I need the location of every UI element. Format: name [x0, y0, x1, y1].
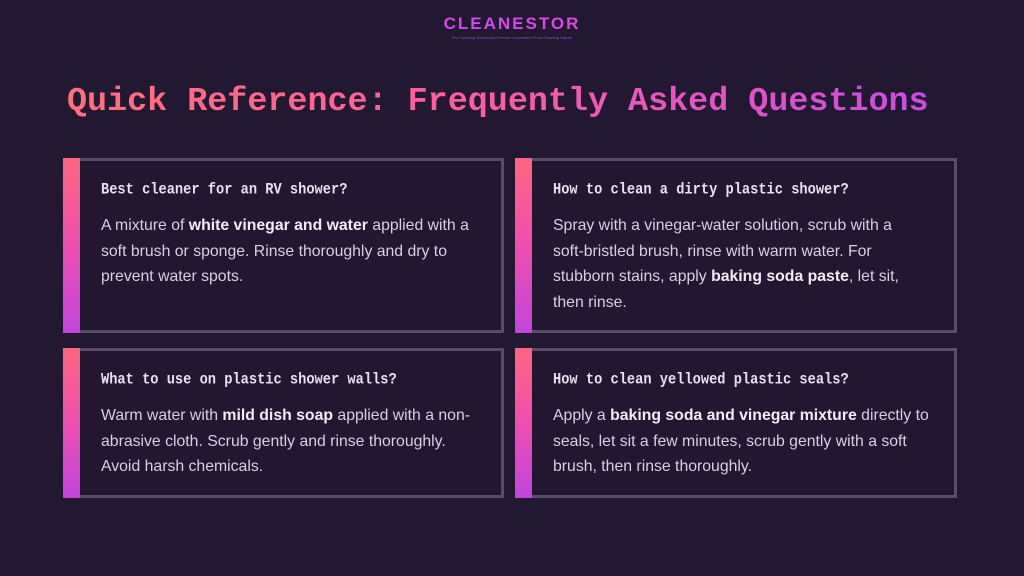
- heading: How to clean a dirty plastic shower?: [553, 182, 849, 199]
- text block: stubborn stains, apply baking soda paste, let sit,: [553, 268, 899, 285]
- title: Quick Reference: Frequently Asked Questions: [67, 83, 929, 121]
- heading: Best cleaner for an RV shower?: [101, 182, 347, 199]
- text block: soft-bristled brush, rinse with warm water. For: [553, 242, 872, 260]
- text block: Spray with a vinegar-water solution, scrub with a: [553, 217, 892, 234]
- text block: brush, then rinse thoroughly.: [553, 458, 752, 475]
- text block: Avoid harsh chemicals.: [101, 458, 263, 475]
- heading: How to clean yellowed plastic seals?: [553, 372, 849, 389]
- logo: Pro Cleaning Guides And Service Journalism From Cleaning Nature: [452, 35, 572, 40]
- text block: [553, 217, 899, 310]
- text block: A mixture of white vinegar and water applied with a: [101, 217, 469, 234]
- text block: [553, 407, 929, 475]
- text block: Warm water with mild dish soap applied with a non-: [101, 407, 470, 424]
- text block: prevent water spots.: [101, 268, 243, 285]
- panel: plastic shower walls: [63, 348, 504, 498]
- heading: What to use on plastic shower walls?: [101, 372, 397, 389]
- panel: best cleaner: [63, 158, 504, 333]
- logo: CLEANESTOR: [444, 14, 580, 33]
- text block: [101, 217, 469, 285]
- text block: seals, let sit a few minutes, scrub gently with a soft: [553, 432, 907, 450]
- text block: soft brush or sponge. Rinse thoroughly and dry to: [101, 242, 447, 260]
- text block: abrasive cloth. Scrub gently and rinse thoroughly.: [101, 432, 446, 450]
- text block: then rinse.: [553, 294, 627, 310]
- panel: dirty plastic shower: [515, 158, 957, 333]
- text block: [101, 407, 470, 475]
- text block: Apply a baking soda and vinegar mixture directly to: [553, 407, 929, 424]
- panel: yellowed seals: [515, 348, 957, 498]
